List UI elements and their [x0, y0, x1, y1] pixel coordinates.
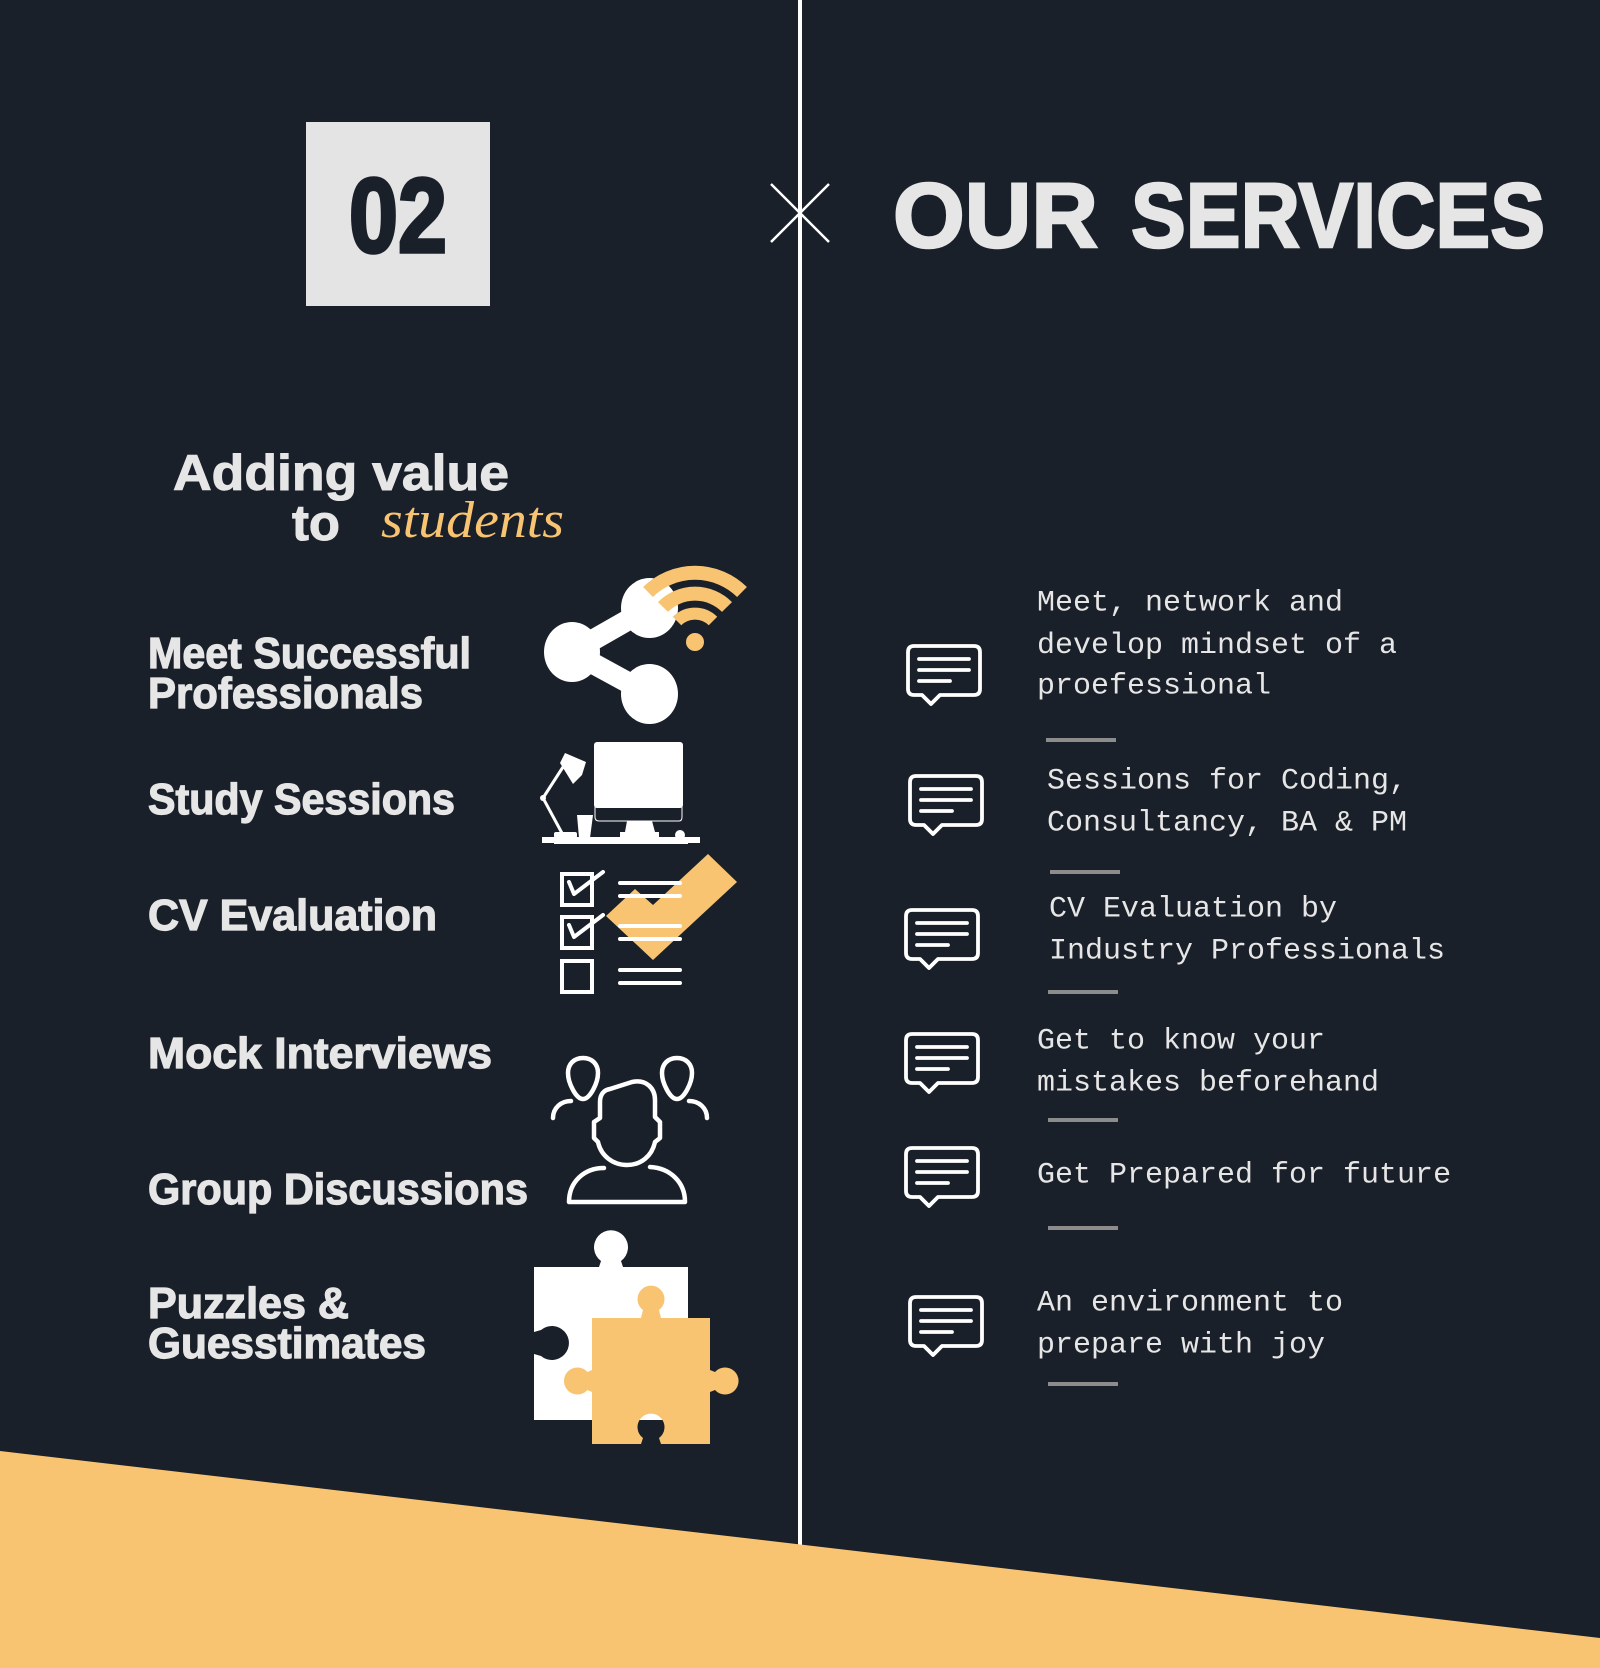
label: meet successful professionals: Professionals [148, 669, 423, 718]
label: study sessions: Study Sessions [148, 775, 455, 824]
label: puzzles and guesstimates [148, 1279, 426, 1368]
item: mistakes: Get to know your [1037, 1024, 1325, 1058]
title: SERVICES [1131, 165, 1545, 267]
item: network [908, 586, 1397, 742]
item: network: Meet, network and [1037, 586, 1343, 620]
label: group discussions: Group Discussions [148, 1165, 528, 1214]
item: sessions [910, 764, 1407, 874]
item: environment: prepare with joy [1037, 1328, 1325, 1362]
item: mistakes: mistakes beforehand [1037, 1066, 1379, 1100]
label: cv evaluation: CV Evaluation [148, 891, 437, 940]
title: OUR [893, 165, 1098, 267]
title [893, 165, 1545, 267]
item: network: proefessional [1037, 670, 1271, 704]
icon: group of people [553, 1058, 707, 1202]
subheading: to [292, 495, 340, 551]
icon: checklist [562, 854, 737, 992]
item: sessions: Sessions for Coding, [1047, 764, 1407, 798]
item: network: develop mindset of a [1037, 629, 1397, 663]
service descriptions: right column [906, 586, 1451, 1386]
label: puzzles and guesstimates: Puzzles & [148, 1279, 349, 1328]
section number badge: 02 [349, 157, 447, 275]
vertical divider line [798, 0, 802, 1550]
label: puzzles and guesstimates: Guesstimates [148, 1319, 426, 1368]
section number badge [306, 122, 490, 306]
item: environment: An environment to [1037, 1286, 1343, 1320]
label: meet successful professionals: Meet Successful [148, 629, 471, 678]
item: environment [910, 1286, 1343, 1386]
item: cv evaluation: Industry Professionals [1049, 934, 1445, 968]
item: future [906, 1148, 1451, 1230]
service list: left labels [148, 629, 528, 1368]
orange bottom wedge [0, 1451, 1600, 1668]
icon: study desk [540, 742, 700, 844]
item: cv evaluation: CV Evaluation by [1049, 892, 1337, 926]
label: meet successful professionals [148, 629, 471, 718]
item: mistakes [906, 1024, 1379, 1122]
item: sessions: Consultancy, BA & PM [1047, 806, 1407, 840]
subheading: students [381, 492, 564, 549]
item: future: Get Prepared for future [1037, 1158, 1451, 1192]
label: mock interviews: Mock Interviews [148, 1029, 492, 1078]
icon: puzzle pieces [534, 1230, 739, 1444]
cross mark [771, 184, 829, 242]
icon: share and wifi [544, 573, 742, 724]
item: cv evaluation [906, 892, 1445, 994]
subheading: Adding value [173, 445, 509, 501]
subheading [173, 445, 564, 551]
